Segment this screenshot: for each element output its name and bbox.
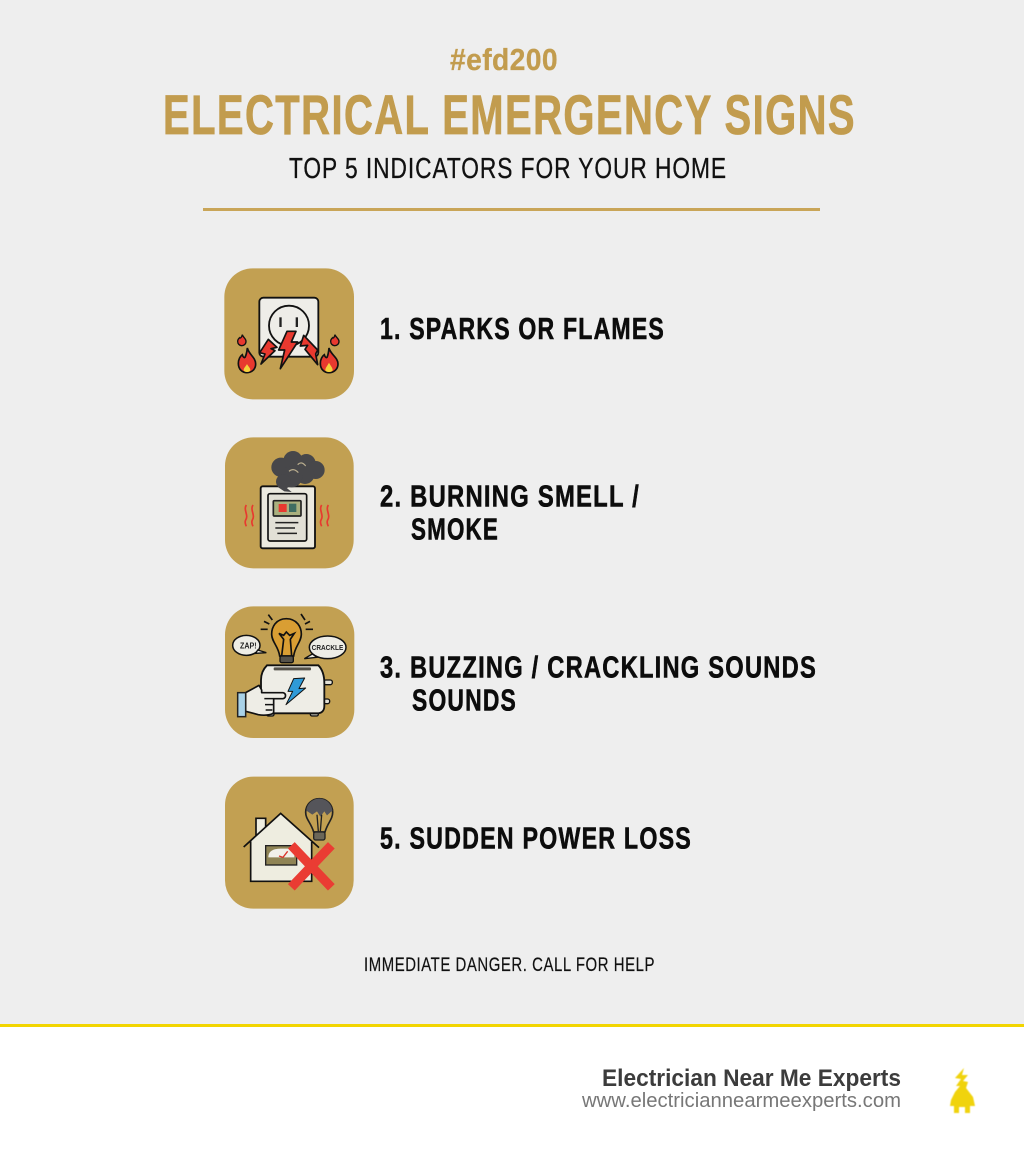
icon: house with dark bulb and red cross	[225, 777, 354, 909]
icon: sparking toaster with bulb and speech bubbles	[225, 606, 354, 738]
item 1 label: 1. SPARKS OR FLAMES	[380, 311, 665, 346]
item 2 label	[380, 478, 640, 546]
item 2 label: 2. BURNING SMELL /	[380, 478, 640, 514]
hex code heading: #efd200	[450, 42, 558, 77]
icon: outlet with sparks and flames	[224, 268, 354, 399]
item 5 label: 5. SUDDEN POWER LOSS	[380, 820, 692, 856]
item 2 label: SMOKE	[411, 512, 499, 546]
item 3 label	[380, 650, 817, 718]
item 3 label: 3. BUZZING / CRACKLING SOUNDS	[380, 650, 817, 684]
closing note: IMMEDIATE DANGER. CALL FOR HELP	[364, 955, 655, 976]
header divider	[203, 208, 820, 211]
footer band	[0, 1024, 1024, 1154]
icon: smoking electrical panel	[225, 437, 354, 568]
icon: sparking toaster with bulb and speech bubbles: ZAP!	[240, 642, 257, 651]
icon: yellow plug with bolt	[950, 1068, 975, 1113]
footer brand name: Electrician Near Me Experts	[602, 1065, 901, 1092]
subtitle: TOP 5 INDICATORS FOR YOUR HOME	[289, 153, 727, 185]
footer url: www.electriciannearmeexperts.com	[581, 1090, 901, 1112]
item 3 label: SOUNDS	[412, 682, 517, 718]
icon: sparking toaster with bulb and speech bubbles: CRACKLE	[312, 645, 344, 652]
